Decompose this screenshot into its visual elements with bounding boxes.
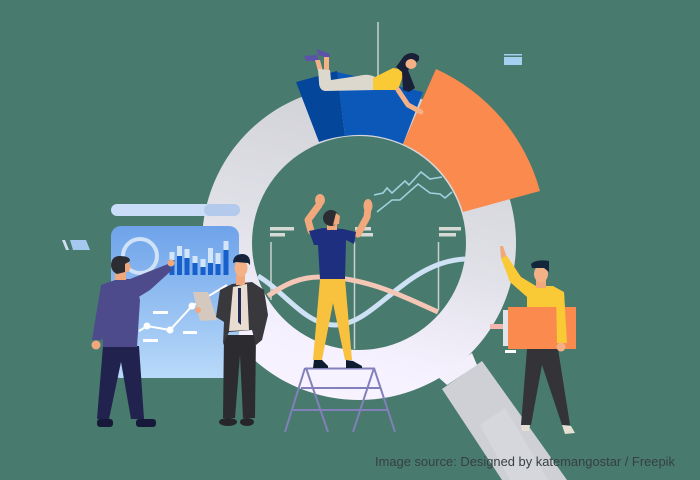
torso	[101, 279, 140, 347]
man with orange folder	[490, 246, 576, 434]
pole	[377, 22, 379, 90]
raised hand	[500, 246, 507, 258]
magnifier handle	[438, 353, 567, 480]
blue ring segment	[296, 71, 423, 144]
head	[323, 210, 340, 230]
bar chart	[170, 241, 228, 275]
man with raised arms on ladder	[285, 194, 395, 432]
trousers	[318, 69, 375, 91]
woman lying on ring	[304, 49, 421, 112]
legs	[223, 335, 256, 418]
arm	[398, 90, 421, 112]
zigzag line lower	[377, 184, 452, 212]
orange ring segment	[403, 69, 540, 212]
small card behind folder	[503, 310, 516, 353]
shoes	[219, 418, 254, 426]
donut chart	[123, 239, 157, 273]
arm raised	[130, 264, 172, 298]
shoes	[313, 360, 362, 368]
shirt and tie	[229, 284, 249, 331]
shoes	[97, 419, 156, 427]
front arm	[556, 291, 567, 343]
man in purple pointing at chart	[92, 256, 174, 427]
chart panel	[111, 204, 240, 378]
arms	[308, 205, 368, 234]
image source credit: Image source: Designed by katemangostar / Freepik	[375, 455, 676, 469]
head	[531, 260, 549, 288]
jacket	[216, 282, 268, 345]
zigzag line upper	[374, 172, 442, 195]
shoes	[521, 425, 575, 434]
ladder	[285, 368, 395, 432]
line chart	[139, 285, 227, 342]
head	[111, 256, 130, 280]
arm down	[92, 285, 110, 340]
head	[233, 254, 250, 285]
blue wave	[258, 259, 465, 325]
man in suit with clipboard	[193, 254, 268, 426]
legs	[97, 346, 144, 419]
pink wave	[268, 277, 438, 312]
decorative tag left	[62, 240, 90, 250]
decorative card top right	[504, 54, 522, 65]
magnifier ring	[202, 86, 516, 400]
panel background	[111, 226, 239, 378]
lens chart	[258, 172, 465, 349]
shirt	[501, 256, 567, 343]
chart guide lines	[270, 227, 461, 349]
panel top bar	[111, 204, 240, 216]
shoes	[304, 49, 330, 61]
trousers	[313, 279, 352, 360]
pink connector	[490, 324, 510, 329]
hair	[396, 53, 419, 92]
legs	[521, 349, 570, 425]
clipboard	[193, 292, 217, 321]
shirt	[309, 228, 356, 279]
orange folder	[508, 307, 576, 349]
top	[373, 68, 405, 90]
